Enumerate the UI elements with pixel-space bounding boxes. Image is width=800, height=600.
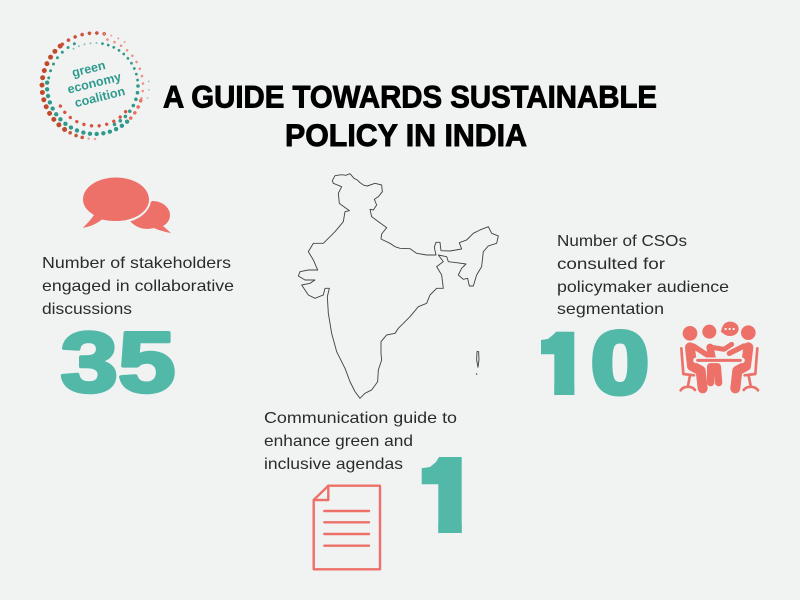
number: 10: 0 <box>591 313 649 412</box>
text: communication guide: Communication guide to <box>264 410 457 427</box>
icon: people at a table <box>681 322 758 390</box>
number: 10: 1 <box>536 313 586 415</box>
number: 35: 35 <box>60 316 176 410</box>
text: CSOs: policymaker audience <box>557 279 729 296</box>
number: 10 <box>541 329 648 396</box>
text: stakeholders <box>42 255 234 318</box>
title <box>163 78 657 153</box>
text: stakeholders: Number of stakeholders <box>42 255 231 272</box>
text: communication guide: enhance green and <box>264 433 413 450</box>
text: stakeholders: discussions <box>42 301 132 318</box>
icon: speech bubbles <box>81 176 171 233</box>
text: CSOs: segmentation <box>557 301 664 318</box>
text: CSOs: consulted for <box>557 256 666 273</box>
title: POLICY IN INDIA <box>285 117 527 153</box>
map of India <box>298 174 498 398</box>
title: A GUIDE TOWARDS SUSTAINABLE <box>163 78 657 114</box>
text: stakeholders: engaged in collaborative <box>42 278 234 295</box>
number: 1: 1 <box>420 439 466 556</box>
logo: green economy coalition: coalition <box>73 84 126 110</box>
text: communication guide <box>264 410 457 473</box>
logo: green economy coalition <box>21 12 169 160</box>
text: CSOs <box>557 233 729 318</box>
logo: green economy coalition: economy <box>66 70 123 97</box>
text: CSOs: Number of CSOs <box>557 233 687 250</box>
icon: document <box>314 486 380 569</box>
text: communication guide: inclusive agendas <box>264 456 403 473</box>
logo: green economy coalition: green <box>70 58 107 80</box>
